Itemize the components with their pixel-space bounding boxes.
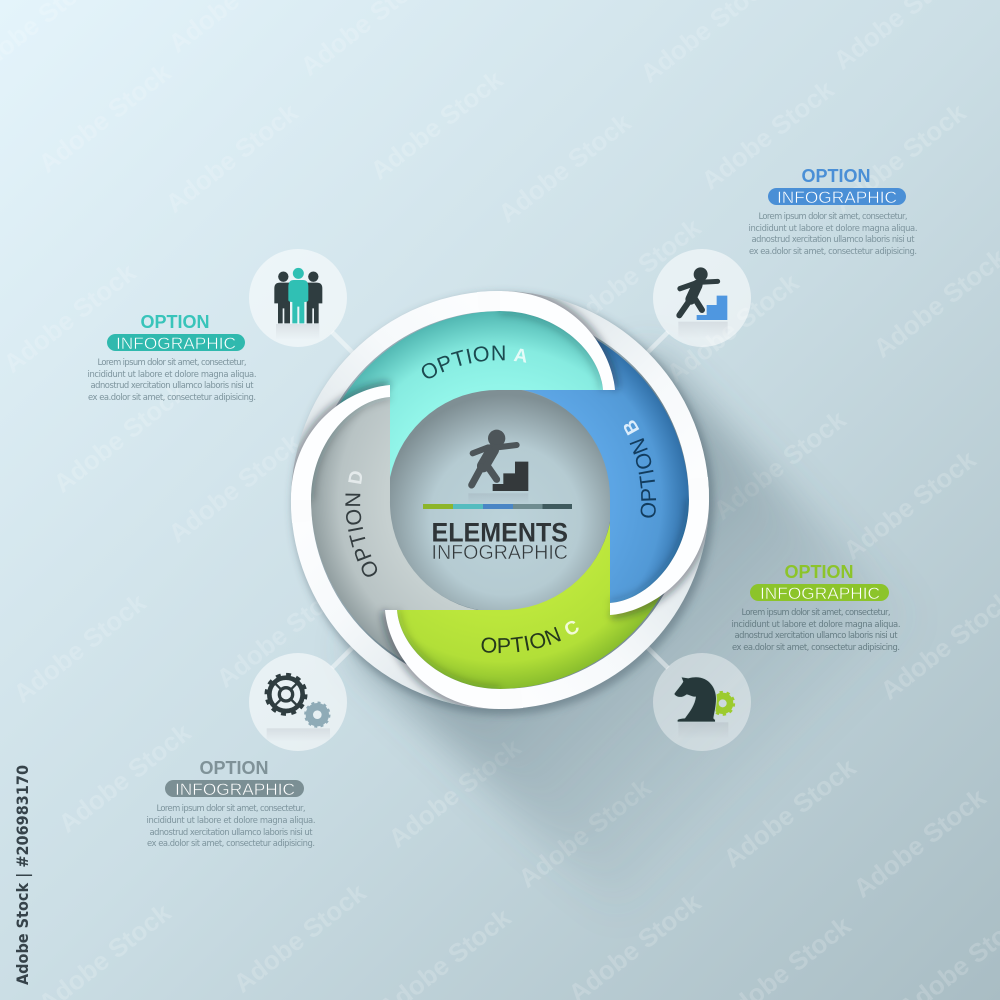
text block: option B blue: incididunt ut labore et dolore magna aliqua.	[748, 223, 918, 233]
center circle	[388, 388, 612, 612]
center heading: ELEMENTS	[432, 518, 568, 548]
text block: option D grey: INFOGRAPHIC	[175, 780, 295, 799]
text block: option A teal: incididunt ut labore et dolore magna aliqua.	[88, 369, 256, 379]
watermarks: Adobe Stock	[838, 444, 982, 566]
watermarks: Adobe Stock	[708, 404, 852, 526]
text block: option B blue	[748, 166, 918, 256]
text block: option A teal	[88, 312, 256, 402]
watermarks: Adobe Stock	[848, 782, 992, 904]
text block: option B blue: adnostrud xercitation ullamco laboris nisi ut	[752, 234, 915, 244]
text block: option A teal: ex ea.dolor sit amet, consectetur adipisicing.	[88, 392, 256, 402]
text block: option B blue: INFOGRAPHIC	[777, 188, 897, 207]
center colour bar	[423, 504, 572, 509]
watermarks: Adobe Stock	[53, 717, 197, 839]
watermarks: Adobe Stock	[48, 377, 192, 499]
text block: option D grey: ex ea.dolor sit amet, consectetur adipisicing.	[147, 838, 315, 848]
text block: option C green: incididunt ut labore et dolore magna aliqua.	[732, 619, 900, 629]
text block: option C green: INFOGRAPHIC	[760, 584, 880, 603]
watermarks: Adobe Stock	[163, 427, 307, 549]
icon circle: chess knight and green gear	[653, 653, 751, 751]
watermarks: Adobe Stock	[513, 772, 657, 894]
text block: option D grey: incididunt ut labore et dolore magna aliqua.	[146, 815, 316, 825]
text block: option B blue: ex ea.dolor sit amet, consectetur adipisicing.	[749, 246, 917, 256]
text block: option D grey: Lorem ipsum dolor sit amet, consectetur,	[156, 803, 306, 813]
text block: option D grey: adnostrud xercitation ullamco laboris nisi ut	[150, 827, 313, 837]
watermarks: Adobe Stock	[211, 572, 355, 694]
long shadow of the wheel	[352, 352, 916, 916]
text block: option C green: adnostrud xercitation ullamco laboris nisi ut	[734, 630, 898, 640]
white ring tails	[301, 301, 699, 699]
watermarks: Adobe Stock	[0, 257, 142, 379]
center heading	[432, 518, 568, 564]
text block: option D grey	[146, 758, 316, 848]
wheel contact shadow	[292, 293, 714, 715]
text block: option A teal: OPTION	[140, 312, 210, 332]
watermarks: Adobe Stock	[383, 732, 527, 854]
text block: option A teal: Lorem ipsum dolor sit amet, consectetur,	[98, 357, 246, 367]
watermarks: Adobe Stock	[661, 267, 805, 389]
watermarks: Adobe Stock	[8, 587, 152, 709]
watermarks: Adobe Stock	[718, 752, 862, 874]
watermarks: Adobe Stock	[33, 57, 177, 179]
label: option C: OPTION C	[482, 620, 579, 654]
text block: option C green: Lorem ipsum dolor sit amet, consectetur,	[742, 607, 890, 617]
text block: option D grey: OPTION	[200, 758, 268, 778]
stock id text: Adobe Stock | #206983170	[13, 765, 33, 985]
seam covers joining heads to ring tails	[301, 301, 699, 699]
icon circle: gears	[249, 653, 347, 751]
label: option B: OPTION B	[624, 420, 656, 518]
panel: option D colour	[311, 397, 477, 670]
text block: option A teal: adnostrud xercitation ullamco laboris nisi ut	[90, 380, 254, 390]
wheel	[288, 288, 717, 718]
band shadows	[291, 291, 709, 709]
center heading: INFOGRAPHIC	[432, 541, 568, 564]
text block: option A teal: INFOGRAPHIC	[116, 334, 236, 353]
text block: option C green	[732, 562, 900, 652]
text block: option B blue: OPTION	[802, 166, 870, 186]
text block: option C green: ex ea.dolor sit amet, consectetur adipisicing.	[732, 642, 900, 652]
connector stems	[332, 332, 668, 668]
panel: option A colour	[330, 311, 603, 477]
watermarks: Adobe Stock	[365, 64, 509, 186]
watermarks: Adobe Stock	[228, 877, 372, 999]
panel: option B colour	[523, 330, 689, 603]
watermarks: Adobe Stock	[493, 107, 637, 229]
panel: option C colour	[397, 523, 670, 689]
watermarks: Adobe Stock	[828, 97, 972, 219]
icon circle: people	[249, 249, 347, 347]
watermarks: Adobe Stock	[563, 212, 707, 334]
watermarks: Adobe Stock	[696, 74, 840, 196]
label: option D: OPTION D	[345, 471, 378, 577]
text block: option B blue: Lorem ipsum dolor sit amet, consectetur,	[758, 211, 908, 221]
label: option A: OPTION A	[422, 346, 526, 378]
text block: option C green: OPTION	[784, 562, 854, 582]
icon circle: runner on blue stairs	[653, 249, 751, 347]
watermarks: Adobe Stock	[160, 97, 304, 219]
white band heads	[291, 291, 709, 709]
center icon: runner on stairs	[468, 430, 528, 504]
